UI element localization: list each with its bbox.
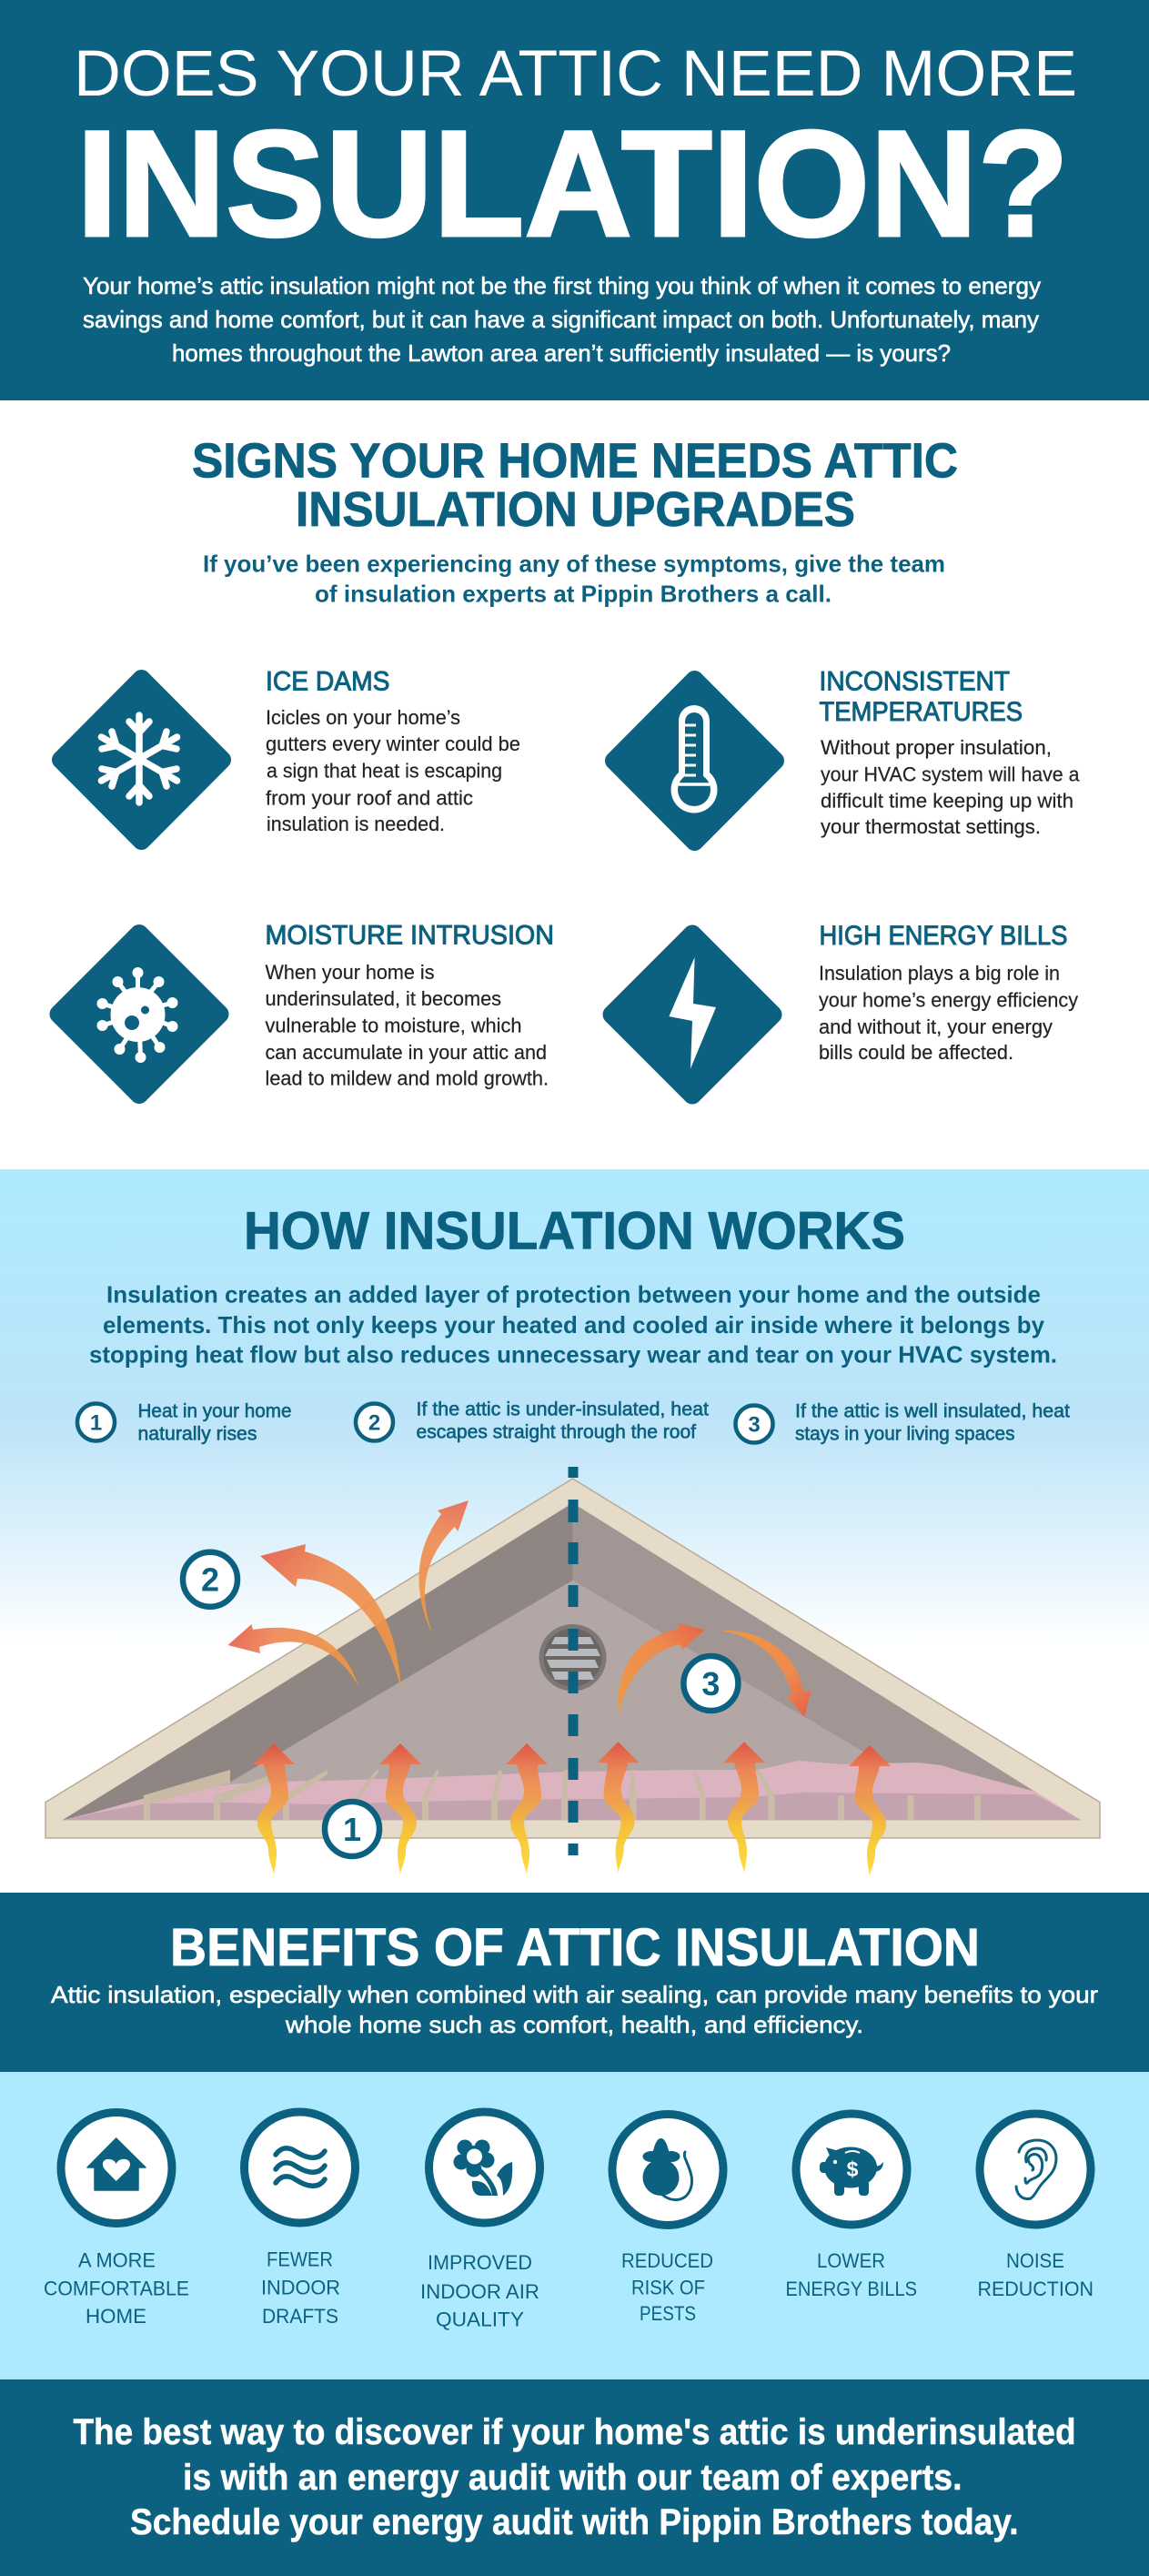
section subheading: signs — [203, 550, 945, 608]
arrow: heat retained rising — [618, 1623, 705, 1713]
benefit: lower energy bills: ENERGY BILLS — [786, 2278, 917, 2300]
section heading: benefits: BENEFITS OF ATTIC INSULATION — [170, 1918, 980, 1977]
benefit: comfortable home: COMFORTABLE — [44, 2277, 189, 2300]
benefit: indoor air quality: QUALITY — [436, 2308, 524, 2331]
text block: inconsistent temperatures: difficult time keeping up with — [821, 790, 1073, 812]
legend item 2: escapes straight through the roof — [417, 1421, 696, 1443]
section heading: signs — [192, 433, 958, 537]
text block: ice dams: a sign that heat is escaping — [267, 759, 502, 783]
benefit: indoor air quality: INDOOR AIR — [420, 2280, 539, 2303]
benefit: fewer drafts: FEWER — [267, 2248, 333, 2271]
text block: inconsistent temperatures: INCONSISTENT — [819, 666, 1010, 697]
text block: moisture intrusion: MOISTURE INTRUSION — [266, 921, 554, 950]
footer text — [73, 2412, 1075, 2542]
section heading: signs: INSULATION UPGRADES — [296, 482, 855, 537]
arrow: heat escaping large — [260, 1544, 401, 1690]
text block: high energy bills: your home’s energy efficiency — [819, 988, 1078, 1012]
heat arrow 3 — [506, 1743, 548, 1874]
text block: ice dams: Icicles on your home’s — [266, 706, 460, 729]
panel: header — [0, 0, 1149, 400]
heat arrow 2 — [379, 1743, 421, 1874]
callout 1: 1 — [343, 1811, 361, 1848]
text block: high energy bills — [819, 921, 1078, 1064]
paragraph: how insulation works: stopping heat flow but also reduces unnecessary wear and tear on your HVAC system. — [89, 1341, 1057, 1369]
section heading: how insulation works: HOW INSULATION WORKS — [244, 1201, 905, 1261]
section heading: signs: SIGNS YOUR HOME NEEDS ATTIC — [192, 433, 958, 488]
panel: how insulation works — [0, 1169, 1149, 1893]
text block: inconsistent temperatures: your thermostat settings. — [821, 815, 1041, 838]
benefit: lower energy bills — [786, 2114, 917, 2300]
text block: inconsistent temperatures: Without proper insulation, — [821, 736, 1052, 759]
attic vent — [539, 1624, 606, 1691]
benefit: comfortable home — [44, 2113, 189, 2328]
footer text: The best way to discover if your home's attic is underinsulated — [73, 2412, 1075, 2452]
footer text: Schedule your energy audit with Pippin Brothers today. — [130, 2502, 1019, 2542]
paragraph: how insulation works: Insulation creates an added layer of protection between your home and the outside — [106, 1281, 1041, 1308]
attic left wall — [63, 1503, 573, 1820]
text block: inconsistent temperatures: your HVAC system will have a — [821, 763, 1080, 786]
benefit: comfortable home: HOME — [86, 2305, 146, 2328]
footer text: is with an energy audit with our team of experts. — [183, 2458, 963, 2498]
legend item 3: 3 — [748, 1412, 761, 1438]
callout 3 — [683, 1656, 738, 1711]
text block: moisture intrusion: When your home is — [266, 961, 435, 984]
benefit: indoor air quality: IMPROVED — [428, 2251, 532, 2274]
callout 1 — [325, 1802, 379, 1856]
panel: signs your home needs upgrades — [0, 400, 1149, 1169]
legend item 3: stays in your living spaces — [795, 1423, 1015, 1445]
paragraph: benefits — [51, 1981, 1098, 2038]
heat arrow 4 — [598, 1742, 640, 1873]
text block: high energy bills: bills could be affected. — [819, 1041, 1013, 1064]
benefit: reduced pests: PESTS — [640, 2302, 696, 2325]
callout 3: 3 — [701, 1665, 720, 1702]
icon: snowflake diamond — [61, 679, 222, 841]
attic right wall — [573, 1503, 1081, 1820]
benefit: reduced pests — [612, 2115, 723, 2325]
paragraph: benefits: Attic insulation, especially when combined with air sealing, can provide many benefits to your — [51, 1981, 1098, 2008]
text block: high energy bills: HIGH ENERGY BILLS — [819, 921, 1068, 951]
insulation upper layer — [63, 1761, 1081, 1820]
benefit: lower energy bills: $ — [847, 2157, 859, 2181]
paragraph: how insulation works: elements. This not only keeps your heated and cooled air inside where it belongs by — [103, 1311, 1045, 1339]
benefit: fewer drafts: DRAFTS — [262, 2305, 338, 2328]
arrow: heat retained falling — [721, 1631, 811, 1717]
intro paragraph: homes throughout the Lawton area aren’t sufficiently insulated — is yours? — [172, 339, 951, 367]
text block: moisture intrusion: underinsulated, it becomes — [266, 987, 501, 1010]
panel: benefits heading band — [0, 1893, 1149, 2072]
benefit: noise reduction: NOISE — [1006, 2249, 1064, 2272]
legend item 1: 1 — [90, 1410, 102, 1436]
benefit: indoor air quality — [420, 2112, 540, 2331]
text block: high energy bills: and without it, your energy — [819, 1015, 1053, 1038]
joist beams — [144, 1770, 775, 1803]
roof and floor frame — [45, 1479, 1100, 1838]
text block: ice dams: from your roof and attic — [266, 786, 473, 810]
attic diagram — [45, 1467, 1100, 1876]
benefit: noise reduction — [977, 2114, 1094, 2300]
panel: footer call to action — [0, 2379, 1149, 2576]
text block: moisture intrusion: lead to mildew and mold growth. — [266, 1066, 549, 1090]
legend item 2 — [356, 1399, 709, 1443]
attic back wall — [166, 1581, 980, 1820]
section subheading: signs: If you’ve been experiencing any of these symptoms, give the team — [203, 550, 945, 577]
icon: thermometer diamond — [614, 680, 775, 842]
text block: ice dams: gutters every winter could be — [266, 732, 520, 755]
text block: inconsistent temperatures: TEMPERATURES — [819, 697, 1023, 727]
paragraph: how insulation works — [89, 1281, 1057, 1369]
heat arrow 5 — [723, 1742, 765, 1873]
intro paragraph: savings and home comfort, but it can have a significant impact on both. Unfortunately, many — [83, 306, 1039, 333]
panel: benefit icons — [0, 2072, 1149, 2379]
joist posts — [144, 1795, 981, 1820]
paragraph: benefits: whole home such as comfort, health, and efficiency. — [285, 2011, 863, 2038]
legend item 2: If the attic is under-insulated, heat — [417, 1399, 709, 1419]
heat arrow 6 — [849, 1745, 891, 1876]
icon: mold spore diamond — [58, 934, 220, 1095]
legend item 3 — [735, 1401, 1070, 1445]
benefit: comfortable home: A MORE — [78, 2249, 156, 2271]
text block: moisture intrusion: can accumulate in your attic and — [266, 1041, 547, 1064]
title line: insulation: INSULATION? — [76, 100, 1069, 268]
intro paragraph: Your home’s attic insulation might not be the first thing you think of when it comes to energy — [83, 272, 1041, 299]
benefit: lower energy bills: LOWER — [817, 2249, 885, 2272]
section subheading: signs: of insulation experts at Pippin Brothers a call. — [315, 581, 832, 608]
title line: does your attic need more: DOES YOUR ATTIC NEED MORE — [74, 38, 1077, 110]
legend item 1: Heat in your home — [138, 1401, 291, 1421]
benefit: fewer drafts: INDOOR — [261, 2277, 340, 2298]
text block: ice dams: ICE DAMS — [266, 666, 389, 697]
text block: inconsistent temperatures — [819, 666, 1080, 838]
intro paragraph — [83, 272, 1041, 367]
heat arrow 1 — [253, 1743, 295, 1874]
arrow: heat escaping far left — [227, 1624, 358, 1686]
text block: moisture intrusion — [266, 921, 554, 1090]
legend item 1: naturally rises — [138, 1423, 257, 1445]
legend item 2: 2 — [368, 1410, 380, 1436]
text block: ice dams — [266, 666, 520, 835]
callout 2 — [183, 1552, 237, 1607]
legend item 1 — [77, 1401, 291, 1445]
insulation lower layer — [63, 1793, 1081, 1820]
callout 2: 2 — [201, 1561, 219, 1599]
benefit: reduced pests: RISK OF — [631, 2277, 705, 2298]
text block: ice dams: insulation is needed. — [267, 813, 445, 835]
icon: lightning bolt diamond — [611, 934, 773, 1096]
benefit: noise reduction: REDUCTION — [977, 2278, 1094, 2300]
legend item 3: If the attic is well insulated, heat — [795, 1401, 1070, 1421]
arrow: heat escaping upward — [418, 1500, 469, 1633]
dashed center divider — [568, 1467, 579, 1855]
benefit: fewer drafts — [244, 2112, 355, 2328]
benefit: reduced pests: REDUCED — [621, 2249, 713, 2272]
text block: high energy bills: Insulation plays a big role in — [819, 962, 1060, 985]
text block: moisture intrusion: vulnerable to moisture, which — [266, 1014, 522, 1037]
